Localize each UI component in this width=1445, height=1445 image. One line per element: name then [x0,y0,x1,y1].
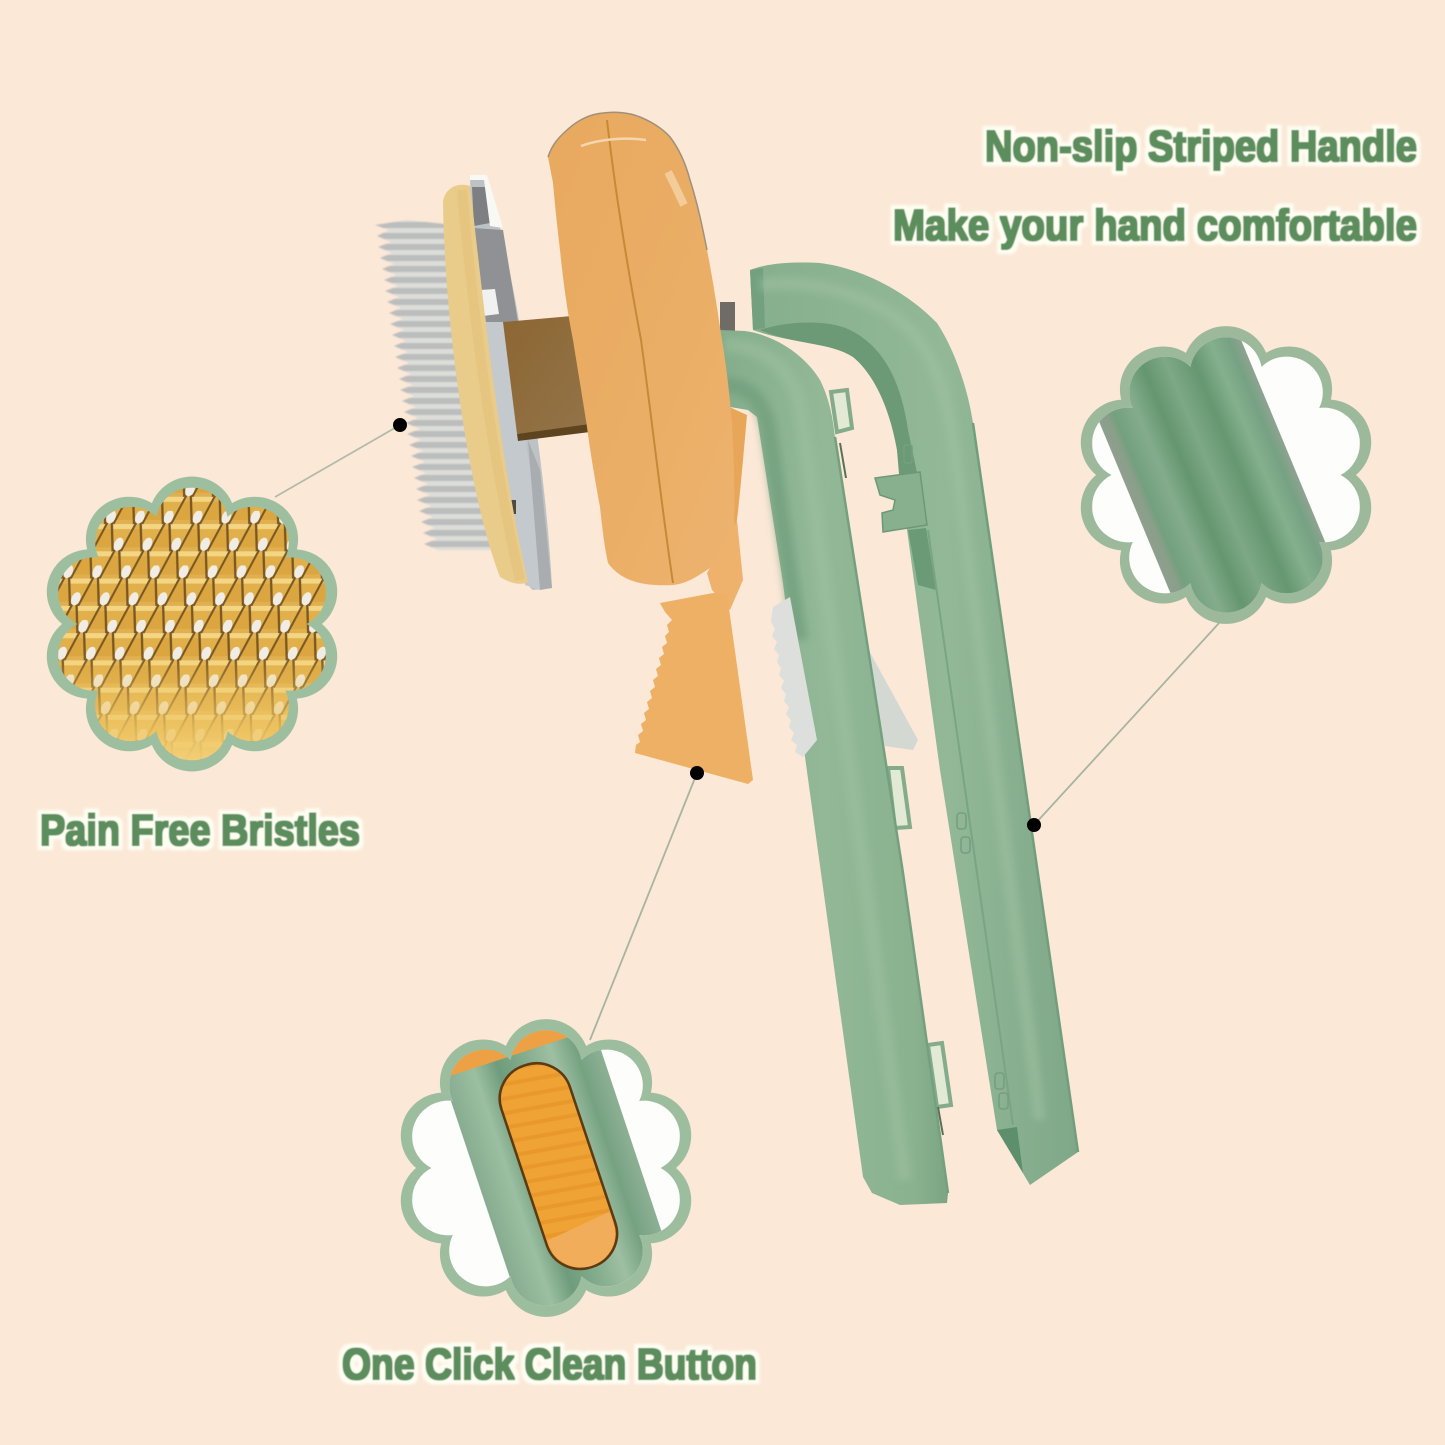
hinge [707,520,743,610]
leader line: button [590,773,697,1040]
wooden base [443,185,528,584]
orange button [491,1054,626,1278]
leader line: bristles [275,425,400,497]
front handle thin edges [840,443,943,1135]
serrated orange flap [635,593,753,784]
connecting block [503,316,590,441]
label: button: One Click Clean Button [342,1340,757,1389]
back handle [750,263,1078,1185]
metal plate [470,175,552,590]
bolt [720,302,735,332]
label: bristles: Pain Free Bristles [40,806,360,855]
black dot: bristles [393,418,407,432]
white comb strip [771,597,817,757]
callout: bristles close-up [46,476,338,772]
T clip [875,472,927,532]
orange flank [720,405,747,560]
grey wiper [866,645,918,750]
leader line: handle [1034,622,1220,825]
callout: striped handle close-up [1080,326,1372,624]
end opening [997,1127,1023,1173]
callout: click button close-up [400,1019,692,1317]
front handle [720,330,948,1205]
cleaning head [548,112,735,585]
black dot: handle [1027,818,1041,832]
black dot: button [690,766,704,780]
embossed marks [904,445,1008,1109]
bristles [375,220,495,550]
front handle clips [831,390,951,1107]
product: exploded brush [375,112,1078,1205]
